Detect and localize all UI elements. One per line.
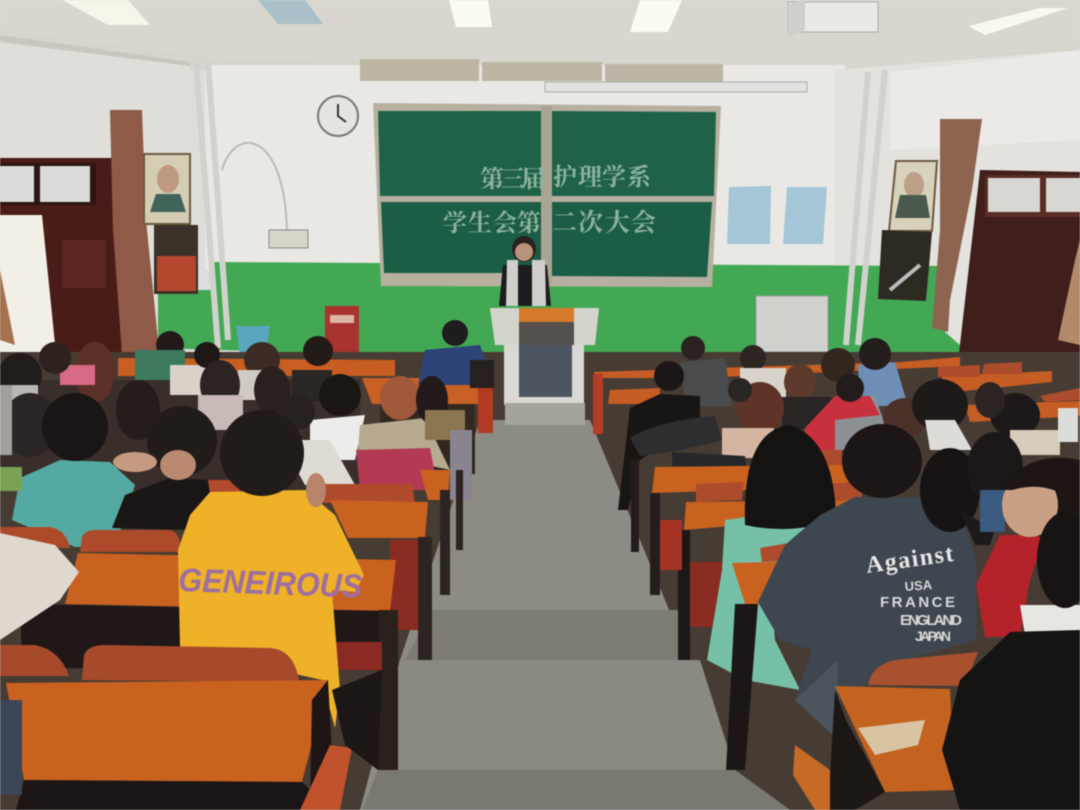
radiator [756,296,828,352]
left door [0,158,122,354]
student with black backpacks [618,361,748,510]
ceiling [0,0,1080,70]
projector [788,0,878,38]
right curtain [932,119,982,332]
wall switch [269,230,308,248]
student in black hoodie [942,512,1080,810]
wall posters [727,186,827,244]
right frame [878,230,932,301]
jacket brand text: Against [864,541,955,579]
floor band [0,352,1080,810]
sweatshirt text: GENEIROUS [178,561,363,604]
left mid students [279,374,472,500]
blue stool [236,326,270,355]
jacket text JAPAN: JAPAN [915,628,951,644]
right near desk [726,541,802,770]
central aisle stairs [360,420,790,810]
student in black jacket [112,406,217,530]
ceiling vents [360,59,807,92]
right front desk [793,652,978,810]
lectern [490,308,599,425]
girl in green coat [707,425,836,690]
jacket text USA: USA [904,577,933,594]
right portrait [889,161,937,231]
jacket text FRANCE: FRANCE [880,594,955,611]
board heading line 2 left: 学生会第 [443,203,541,238]
dark students right [920,432,1023,545]
green wainscot [158,262,1080,390]
fire notice [325,306,359,359]
student in white top left [0,533,79,640]
girl in red [976,458,1080,637]
right door [958,170,1080,388]
board heading line 1 right: 护理学系 [553,157,652,192]
board heading line 1 left: 第三届 [480,159,545,194]
student in blue jacket [418,320,494,388]
right mid desks [631,450,862,660]
speaker [499,236,551,306]
left front desk [0,645,382,810]
left back desks [118,358,493,474]
left curtain [110,110,159,354]
left desk row two [0,527,398,770]
student in denim jacket [758,424,976,738]
chalkboard [373,103,721,287]
left desk row three [205,470,463,660]
left portrait [144,154,190,224]
wall clock [318,96,358,136]
left back crowd [0,331,360,490]
board heading line 2 right: 二次大会 [552,203,656,239]
left notice board [154,225,198,294]
right back crowd [680,336,1078,458]
back and side walls [0,35,1080,360]
jacket text ENGLAND: ENGLAND [900,612,962,629]
student in teal shirt [0,393,135,547]
student in yellow sweatshirt [178,410,364,728]
wall pipes [196,62,885,348]
right back desks [593,357,1080,434]
